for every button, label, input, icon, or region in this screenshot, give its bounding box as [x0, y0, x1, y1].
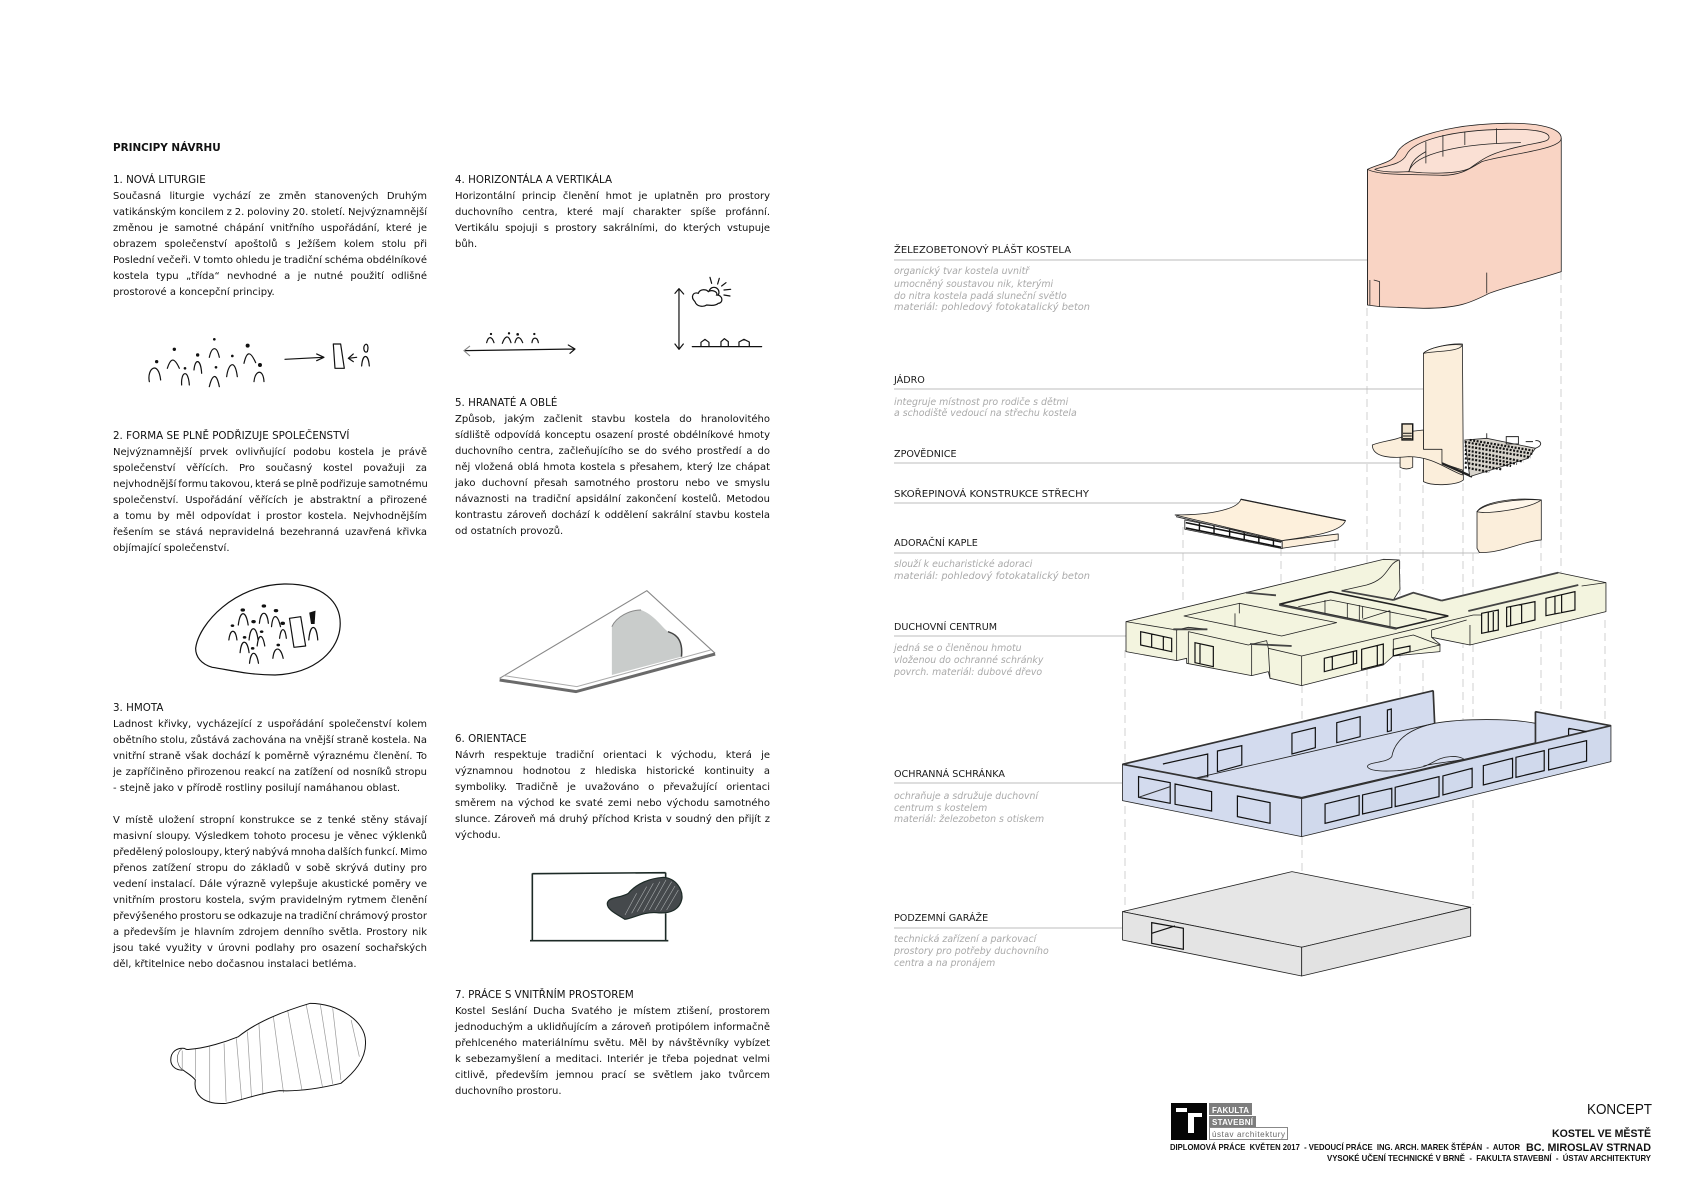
label: spiritual centre: jedná se o členěnou hmotu — [892, 643, 1022, 654]
text block: 5 angular and rounded: jako duchovní přesah samotného prostoru nebo ve smyslu — [455, 478, 770, 489]
footer: project title block: BC. MIROSLAV STRNAD — [1526, 1142, 1651, 1154]
text block: 1 new liturgy: prostorové a koncepční principy. — [113, 287, 275, 298]
text block: 4 horizontal and vertical — [455, 173, 770, 250]
text block: 1 new liturgy: kostela typu „třída“ nevhodné a je nutné použití odlišné — [113, 271, 427, 282]
text block: 2 form follows community: společenství. Uspořádání věřících je abstraktní a přirozené — [113, 495, 427, 506]
footer: project title block: DIPLOMOVÁ PRÁCE KVĚTEN 2017 - VEDOUCÍ PRÁCE ING. ARCH. MAREK ŠTĚPÁN - AUTOR — [1170, 1141, 1520, 1152]
axonometry: protective shell — [1122, 691, 1611, 837]
text block: 3 mass: masivní sloupy. Výsledkem tohoto procesu je věnec výklenků — [113, 831, 427, 842]
label: reinforced concrete shell — [894, 243, 1090, 313]
text block: 3 mass: je zapříčiněno přirozenou reakcí na zatížení od nosníků stropu — [113, 767, 427, 778]
label: confessional: ZPOVĚDNICE — [894, 447, 957, 460]
text block: 6 orientation: symboliky. Tradičně je uvažováno o převažující orientaci — [455, 782, 770, 793]
text block: 6 orientation: směrem na východ ke svaté zemi nebo východu samotného — [455, 798, 770, 809]
label: shell roof: SKOŘEPINOVÁ KONSTRUKCE STŘECHY — [894, 487, 1089, 500]
sketch: horizontal and vertical principle — [464, 277, 762, 356]
label: underground garages: prostory pro potřeby duchovního — [893, 946, 1049, 957]
label: reinforced concrete shell: organický tvar kostela uvnitř — [894, 266, 1030, 277]
text block: 7 interior space: přehlceného materiálnímu světu. Měl by návštěvníky vybízet — [455, 1038, 770, 1049]
label: core: a schodiště vedoucí na střechu kostela — [894, 408, 1077, 419]
text block: 2 form follows community: 2. FORMA SE PLNĚ PODŘIZUJE SPOLEČENSTVÍ — [113, 430, 349, 442]
label: spiritual centre: povrch. materiál: dubové dřevo — [893, 667, 1042, 678]
text block: 3 mass: vnitřní straně však dochází k poměrně výraznému členění. To — [113, 751, 427, 762]
label: adoration chapel: materiál: pohledový fotokatalický beton — [894, 571, 1090, 582]
text block: 6 orientation: významnou hodnotou z hlediska historické kontinuity a — [455, 766, 770, 777]
text block: 1 new liturgy: Současná liturgie vychází ze změn stanovených Druhým — [113, 191, 427, 202]
title: PRINCIPY NÁVRHU — [113, 142, 221, 154]
text block: 2 form follows community: společenství věřících. Pro současný kostel považuji za — [113, 463, 427, 474]
label: protective shell: centrum s kostelem — [894, 803, 987, 814]
footer: project title block: VYSOKÉ UČENÍ TECHNICKÉ V BRNĚ - FAKULTA STAVEBNÍ - ÚSTAV ARCHITEKTURY — [1327, 1152, 1651, 1163]
text block: 5 angular and rounded — [454, 396, 770, 537]
text block: 3 mass: vnitřním prostoru kostela, svým pravidelným rytmem členění — [113, 895, 427, 906]
logo: faculty mark — [1171, 1103, 1288, 1140]
text block: 3 mass: Ladnost křivky, vycházející z uspořádání společenství kolem — [113, 719, 427, 730]
label: adoration chapel: slouží k eucharistické adoraci — [894, 559, 1033, 570]
text block: 5 angular and rounded: sídliště odpovídá konceptu osazení prosté obdélníkové hmoty — [455, 430, 770, 441]
label: spiritual centre: vloženou do ochranné schránky — [894, 655, 1044, 666]
text block: 3 mass — [112, 702, 428, 970]
text block: 7 interior space: jednoduchým a uklidňujícím a zároveň protipólem informačně — [455, 1022, 770, 1033]
text block: 7 interior space — [454, 988, 770, 1097]
axonometry: ribbed roof mesh of the core — [1465, 433, 1541, 477]
logo: faculty mark: FAKULTA — [1212, 1106, 1249, 1115]
text block: 7 interior space: k sebezamyšlení a meditaci. Interiér je třeba pojednat velmi — [455, 1054, 770, 1065]
text block: 3 mass: - stejně jako v přírodě rostliny posilují namáhanou oblast. — [113, 783, 400, 794]
text block: 7 interior space: duchovního prostoru. — [455, 1086, 562, 1097]
footer: project title block: KONCEPT — [1587, 1101, 1652, 1118]
text block: 5 angular and rounded: od ostatních provozů. — [455, 526, 563, 537]
text block: 7 interior space: Kostel Seslání Ducha Svatého je místem ztišení, prostorem — [455, 1006, 770, 1017]
text block: 1 new liturgy: vatikánským koncilem z 2. poloviny 20. století. Nejvýznamnější — [113, 207, 427, 218]
axonometry: underground garages — [1122, 872, 1471, 976]
axonometry: core — [1423, 344, 1463, 485]
label: underground garages — [893, 911, 1049, 969]
text block: 7 interior space: 7. PRÁCE S VNITŘNÍM PROSTOREM — [455, 989, 634, 1001]
text block: 3 mass: a především je hlavním zdrojem denního světla. Prostory nik — [113, 927, 427, 938]
text block: 2 form follows community: Nejvýznamnější prvek ovlivňující podobu kostela je právě — [113, 447, 427, 458]
text block: 5 angular and rounded: něj vložená oblá hmota kostela s přesahem, který lze chápat — [455, 462, 770, 473]
label: reinforced concrete shell: ŽELEZOBETONOVÝ PLÁŠT KOSTELA — [894, 243, 1071, 256]
text block: 3 mass: 3. HMOTA — [113, 702, 163, 714]
label: adoration chapel: ADORAČNÍ KAPLE — [894, 536, 978, 549]
sketch: plan of the ribbed church mass — [171, 1003, 366, 1103]
label: spiritual centre — [892, 620, 1044, 678]
text block: 2 form follows community: objímající společenství. — [113, 543, 230, 554]
text block: 2 form follows community: řešením se stává nepravidelná bezehranná uzavřená křivka — [113, 527, 427, 538]
label: protective shell: ochraňuje a sdružuje duchovní — [894, 791, 1039, 802]
logo: faculty mark: ústav architektury — [1212, 1130, 1285, 1139]
label: spiritual centre: DUCHOVNÍ CENTRUM — [894, 620, 997, 633]
label: reinforced concrete shell: do nitra kostela padá sluneční světlo — [894, 291, 1067, 302]
label: protective shell: materiál: železobeton s otiskem — [894, 814, 1044, 825]
text block: 2 form follows community: a tomu by měl odpovídat i prostor kostela. Nejvhodnějším — [113, 511, 427, 522]
text block: 1 new liturgy: 1. NOVÁ LITURGIE — [113, 174, 206, 186]
footer: project title block — [1170, 1101, 1652, 1163]
text block: 5 angular and rounded: Způsob, jakým začlenit stavbu kostela do hranolovitého — [455, 414, 770, 425]
label: underground garages: PODZEMNÍ GARÁŽE — [894, 911, 988, 924]
text block: 4 horizontal and vertical: Vertikálu spojuji s prostory sakrálními, do kterých vstupuje — [455, 223, 770, 234]
text block: 5 angular and rounded: kontrastu zároveň dochází k oddělení sakrální stavbu kostela — [455, 510, 770, 521]
leader lines: other layers — [894, 389, 1479, 928]
text block: 3 mass: předělený polosloupy, který nabývá mnoha dalších funkcí. Mimo — [113, 847, 427, 858]
leader line: shell — [894, 259, 1367, 261]
text block: 3 mass: obětního stolu, zůstává zachována na vnější straně kostela. Na — [113, 735, 427, 746]
text block: 5 angular and rounded: duchovního centra, začleňujícího se do svého prostředí a do — [455, 446, 770, 457]
axonometry: spiritual centre — [1126, 559, 1606, 686]
text block: 4 horizontal and vertical: bůh. — [455, 239, 477, 250]
axonometry: shell roof — [1175, 499, 1346, 549]
text block: 6 orientation: 6. ORIENTACE — [455, 733, 527, 745]
text block: 3 mass: jsou také využity v úrovni podlahy pro osazení sochařských — [113, 943, 427, 954]
dashed projection lines — [1125, 272, 1605, 947]
sketch: orientation of the church to the east — [530, 873, 682, 941]
footer: project title block: KOSTEL VE MĚSTĚ — [1552, 1127, 1651, 1140]
sketch: curve embracing the community — [196, 584, 340, 675]
label: underground garages: centra a na pronájem — [894, 958, 995, 969]
label: core — [893, 373, 1077, 419]
axonometry: adoration chapel — [1477, 499, 1541, 553]
logo: faculty mark: STAVEBNÍ — [1212, 1118, 1254, 1127]
axonometry: church shell — [1367, 123, 1561, 308]
text block: 1 new liturgy: Poslední večeři. V tomto ohledu je tradiční schéma obdélníkové — [113, 255, 427, 266]
label: core: integruje místnost pro rodiče s dětmi — [894, 397, 1069, 408]
text block: 6 orientation — [455, 733, 770, 841]
text block: 3 mass: V místě uložení stropní konstrukce se z tenké stěny stávají — [113, 815, 427, 826]
text block: 5 angular and rounded: 5. HRANATÉ A OBLÉ — [455, 397, 557, 409]
axonometry: confessional platform and stair — [1372, 424, 1472, 477]
label: reinforced concrete shell: materiál: pohledový fotokatalický beton — [894, 302, 1090, 313]
text block: 6 orientation: východu. — [455, 830, 501, 841]
text block: 4 horizontal and vertical: Horizontální princip členění hmot je uplatněn pro prostory — [455, 191, 770, 202]
label: adoration chapel — [894, 536, 1090, 582]
text block: 1 new liturgy: obrazem společenství apoštolů s Ježíšem kolem stolu při — [113, 239, 427, 250]
label: protective shell — [894, 767, 1044, 825]
text block: 1 new liturgy — [113, 173, 428, 298]
text block: 5 angular and rounded: návaznosti na tradiční apsidální zakončení kostelů. Metodou — [455, 494, 770, 505]
sketch: congregation facing the altar — [149, 338, 369, 387]
text block: 2 form follows community — [113, 429, 428, 554]
text block: 6 orientation: Návrh respektuje tradiční orientaci k východu, která je — [455, 750, 770, 761]
text block: 3 mass: vedení instalací. Dále výrazně vylepšuje akustické poměry ve — [113, 879, 427, 890]
text block: 7 interior space: citlivě, především jemnou prací se světlem jako tvůrcem — [455, 1070, 770, 1081]
text block: 3 mass: děl, křtitelnice nebo dočasnou instalaci betléma. — [113, 959, 357, 970]
sketch: angular building and rounded mass — [500, 591, 715, 692]
text block: 1 new liturgy: změnou je samotné chápání vnitřního uspořádání, které je — [113, 223, 427, 234]
text block: 3 mass: převýšeného prostoru se odkazuje na tradiční chrámový prostor — [113, 911, 427, 922]
label: core: JÁDRO — [893, 373, 925, 386]
text block: 3 mass: přenos zatížení stropu do základů v sobě skrývá dutiny pro — [113, 863, 427, 874]
label: reinforced concrete shell: umocněný soustavou nik, kterými — [894, 279, 1054, 290]
text block: 6 orientation: slunce. Zároveň má druhý příchod Krista v soudný den přijít z — [455, 814, 770, 825]
label: underground garages: technická zařízení a parkovací — [894, 934, 1038, 945]
text block: 4 horizontal and vertical: 4. HORIZONTÁLA A VERTIKÁLA — [455, 174, 612, 186]
text block: 2 form follows community: nejvhodnější formu takovou, která se plně podřizuje samotnému — [113, 479, 428, 490]
label: protective shell: OCHRANNÁ SCHRÁNKA — [894, 767, 1005, 780]
text block: 4 horizontal and vertical: duchovního centra, které mají charakter spíše profánní. — [455, 207, 770, 218]
